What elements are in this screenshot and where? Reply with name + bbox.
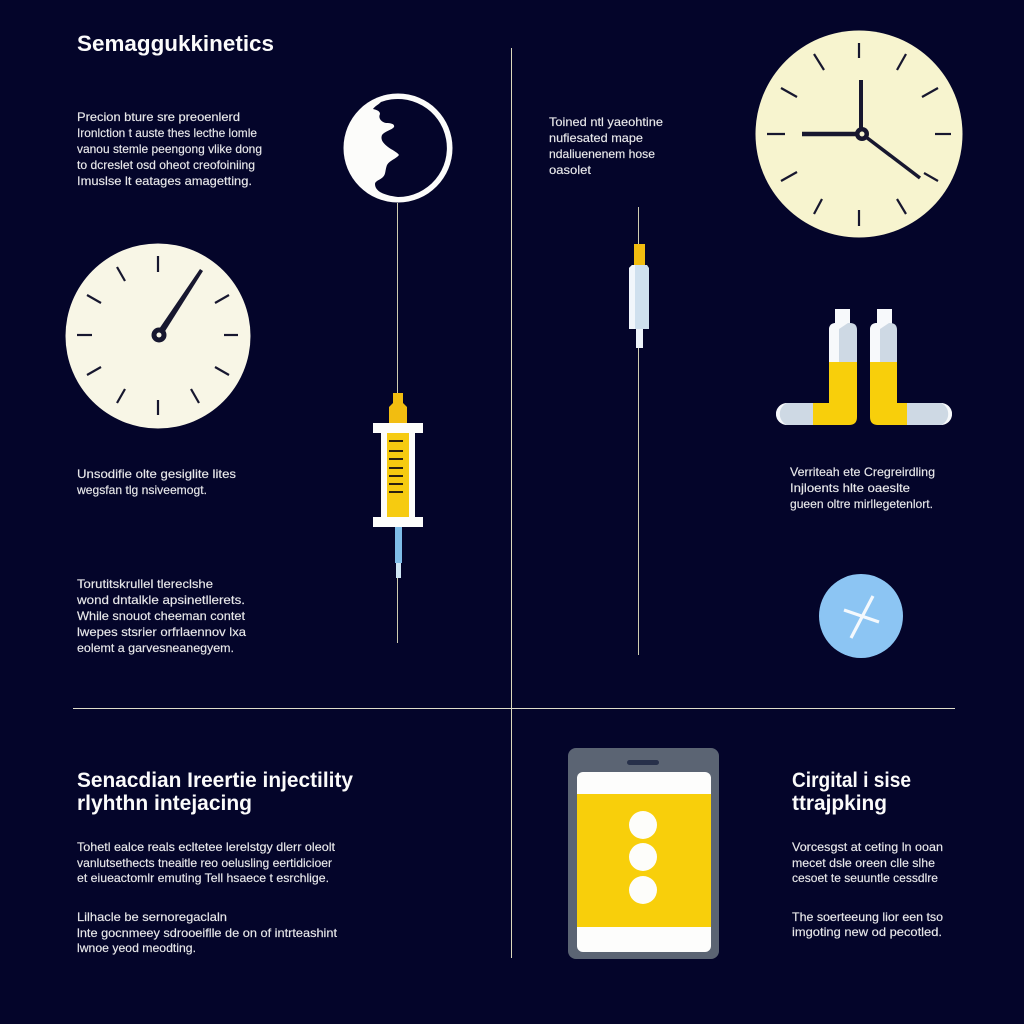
heading: digital tracking: ttrajpking — [792, 792, 887, 815]
icon: small pen injector — [629, 207, 649, 655]
text block: bottom right first: mecet dsle oreen clle slhe — [792, 856, 935, 870]
icon: phone — [568, 748, 719, 959]
text block: right middle: gueen oltre mirllegetenlort. — [790, 497, 933, 511]
text block: right middle — [790, 465, 935, 511]
text block: top centre right: oasolet — [549, 163, 592, 177]
text block: intro: Precion bture sre preoenlerd — [77, 110, 240, 124]
heading: digital tracking: Cirgital i sise — [792, 769, 911, 792]
text block: top centre right: ndaliuenenem hose — [549, 147, 655, 161]
icon: blue cross badge — [819, 574, 903, 658]
heading: circadian rhythm — [77, 769, 353, 815]
heading: circadian rhythm: rlyhthn intejacing — [77, 792, 252, 815]
text block: bottom left first: Tohetl ealce reals ecltetee lerelstgy dlerr oleolt — [77, 840, 336, 854]
icon: right bent vial — [870, 309, 952, 425]
text block: left lower: Torutitskrullel tlereclshe — [77, 577, 213, 591]
text block: bottom left second: Lilhacle be sernoregaclaln — [77, 910, 227, 924]
icon: left clock — [66, 244, 250, 428]
text block: bottom right first: Vorcesgst at ceting ln ooan — [792, 840, 943, 854]
text block: bottom right first — [792, 840, 943, 885]
text block: bottom left first: et eiueactomlr emuting Tell hsaece t esrchlige. — [77, 871, 329, 885]
text block: left lower: eolemt a garvesneanegyem. — [77, 641, 234, 655]
text block: bottom left first — [77, 840, 336, 885]
text block: bottom right second: The soerteeung lior een tso — [792, 910, 943, 924]
text block: left lower: lwepes stsrier orfrlaennov lxa — [77, 625, 246, 639]
text block: left lower: wond dntalkle apsinetllerets. — [76, 593, 245, 607]
thin line: upper stem — [396, 203, 398, 394]
text block: left middle: wegsfan tlg nsiveemogt. — [76, 483, 207, 497]
text block: top centre right — [549, 115, 663, 177]
text block: intro: to dcreslet osd oheot creofoiniing — [77, 158, 255, 172]
title: Semaggukkinetics — [77, 31, 274, 56]
text block: left lower: While snouot cheeman contet — [77, 609, 246, 623]
icon: moon phase circle — [344, 94, 452, 202]
text block: bottom left second — [77, 910, 338, 955]
text block: bottom left second: lnte gocnmeey sdrooeiflle de on of intrteashint — [77, 926, 338, 940]
text block: bottom right first: cesoet te seuuntle cessdlre — [792, 871, 938, 885]
text block: bottom right second — [792, 910, 943, 939]
icon: left bent vial — [776, 309, 857, 425]
text block: intro — [77, 110, 262, 188]
text block: bottom left first: vanlutsethects tneaitle reo oelusling eertidicioer — [77, 856, 332, 870]
text block: top centre right: Toined ntl yaeohtine — [549, 115, 663, 129]
text block: intro: Ironlction t auste thes lecthe lomle — [77, 126, 257, 140]
heading: circadian rhythm: Senacdian Ireertie injectility — [77, 769, 353, 792]
text block: bottom right second: imgoting new od pecotled. — [792, 925, 942, 939]
text block: bottom left second: lwnoe yeod meodting. — [77, 941, 196, 955]
text block: left lower — [76, 577, 246, 655]
icon: main syringe — [373, 393, 423, 578]
text block: left middle — [76, 467, 236, 497]
text block: top centre right: nufiesated mape — [549, 131, 643, 145]
thin line: lower needle — [396, 578, 398, 643]
text block: intro: vanou stemle peengong vlike dong — [77, 142, 262, 156]
text block: intro: Imuslse lt eatages amagetting. — [77, 174, 252, 188]
text block: right middle: Injloents hlte oaeslte — [790, 481, 910, 495]
text block: right middle: Verriteah ete Cregreirdling — [790, 465, 935, 479]
text block: left middle: Unsodifie olte gesiglite lites — [77, 467, 236, 481]
heading: digital tracking — [792, 769, 911, 815]
icon: right clock — [756, 30, 962, 238]
